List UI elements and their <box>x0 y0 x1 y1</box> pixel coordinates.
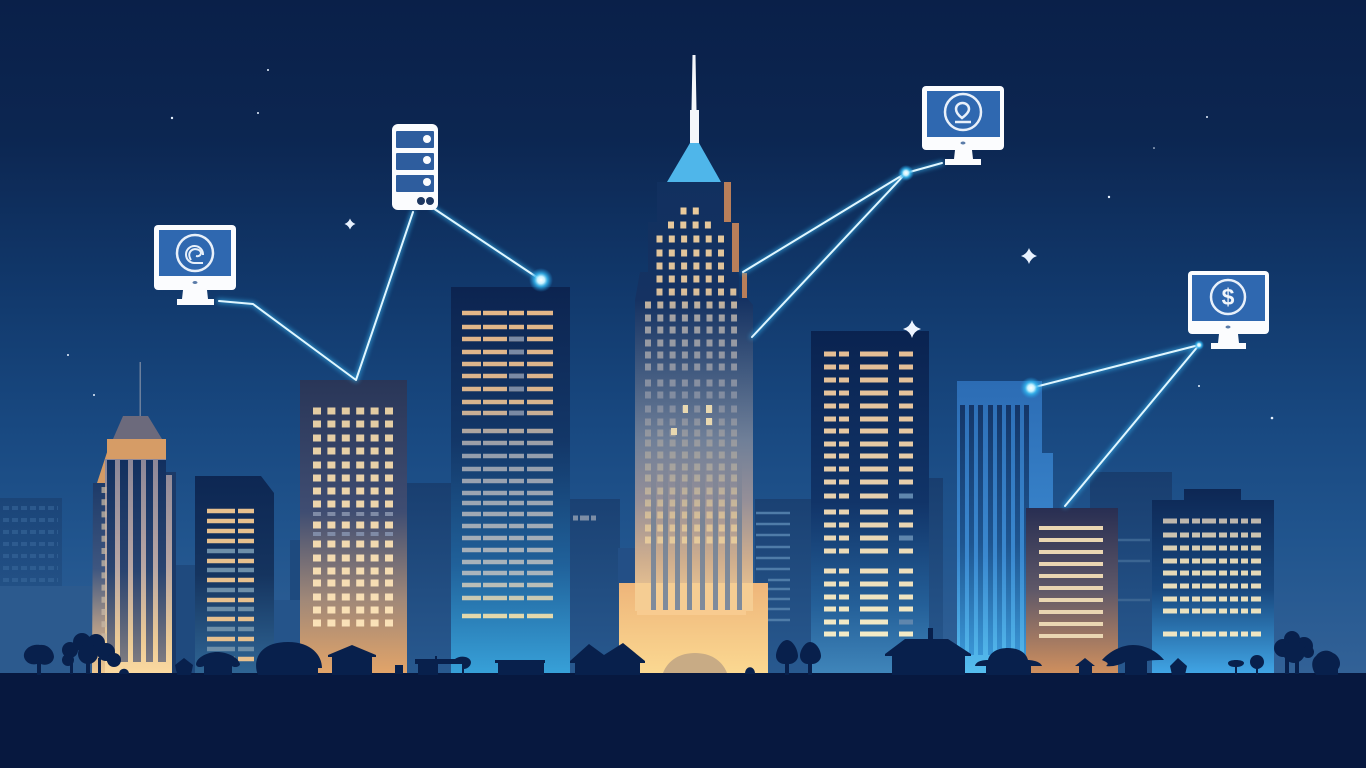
building 4: tall slab <box>451 287 570 675</box>
dome <box>119 669 129 674</box>
network connection lines <box>219 163 1199 506</box>
tree cluster <box>62 633 121 674</box>
windows <box>645 211 737 540</box>
lit windows <box>207 511 254 659</box>
stars <box>67 69 1273 419</box>
dark columns <box>107 460 166 662</box>
dim windows <box>899 496 913 622</box>
cap band <box>107 439 166 459</box>
dim windows <box>313 514 393 534</box>
sparkle star left <box>344 218 356 230</box>
icon: server <box>392 124 438 210</box>
small house 2 <box>1075 658 1095 675</box>
flat stall <box>495 660 545 675</box>
small windows next to tower <box>573 516 601 520</box>
ground <box>0 673 1366 768</box>
antenna <box>140 362 141 417</box>
right side <box>166 472 176 673</box>
icon: monitor top right <box>922 86 1004 165</box>
floor windows <box>462 313 553 616</box>
small hut <box>175 658 193 675</box>
side windows <box>102 487 106 642</box>
ledge <box>637 610 746 615</box>
sparkle star centre <box>903 320 921 338</box>
tree 1 <box>24 645 54 675</box>
spire <box>690 55 699 143</box>
icon: monitor with dollar <box>1188 271 1269 349</box>
bench structure <box>415 656 471 675</box>
tree oval 2 <box>800 642 821 675</box>
small dome right <box>745 667 755 674</box>
lower vertical gaps <box>651 460 742 610</box>
dimmed floor segments <box>509 339 524 413</box>
blue crown <box>667 143 721 182</box>
large hut <box>1102 645 1164 675</box>
faint lines on rear building <box>1118 540 1150 600</box>
round shrub building <box>256 642 322 675</box>
mushroom hut right <box>975 648 1042 675</box>
large house <box>885 628 971 675</box>
network connection lines glow <box>219 163 1199 506</box>
building 2: dark block <box>195 476 274 673</box>
building 7: orange block <box>1026 508 1118 675</box>
bright single windows <box>671 405 712 435</box>
sparkle star right <box>1021 248 1037 264</box>
building 5: right slab <box>811 331 929 675</box>
foreground silhouettes: trees and houses <box>24 628 1340 675</box>
faint windows on far-left building <box>3 508 58 580</box>
left wing <box>92 483 107 673</box>
building 6: blue striped tower <box>957 381 1053 673</box>
copper edge strips <box>724 182 747 298</box>
body <box>105 459 172 673</box>
lit windows <box>313 411 393 623</box>
building 1: left spire tower <box>92 362 176 673</box>
twin houses <box>570 643 645 675</box>
background silhouette buildings <box>0 472 1172 676</box>
arch <box>663 653 727 673</box>
central skyscraper <box>619 55 768 673</box>
small house 3 <box>1170 658 1187 675</box>
windows <box>1163 521 1261 634</box>
windows <box>824 354 913 634</box>
icon: monitor with dollar: $ <box>1222 284 1235 310</box>
glowing nodes <box>529 165 1204 399</box>
mushroom hut <box>196 652 240 675</box>
roof <box>113 416 162 439</box>
tree cluster right <box>1274 631 1314 674</box>
icon: monitor left <box>154 225 236 305</box>
house <box>328 645 376 675</box>
building 3: orange-glow block <box>300 380 407 673</box>
oval tree <box>1250 655 1264 675</box>
podium centre glow <box>635 583 753 611</box>
small tree <box>1228 660 1244 675</box>
tree oval 1 <box>776 640 798 675</box>
small box <box>395 665 403 674</box>
floor lines <box>1039 528 1103 636</box>
building 8: right block <box>1152 489 1274 673</box>
round shrub right <box>1312 651 1340 675</box>
base podium <box>619 583 768 673</box>
stepped shaft <box>635 182 753 583</box>
horizontal window lines beside tower <box>756 513 790 620</box>
dark stripes <box>960 405 1029 655</box>
dim windows <box>207 551 254 649</box>
